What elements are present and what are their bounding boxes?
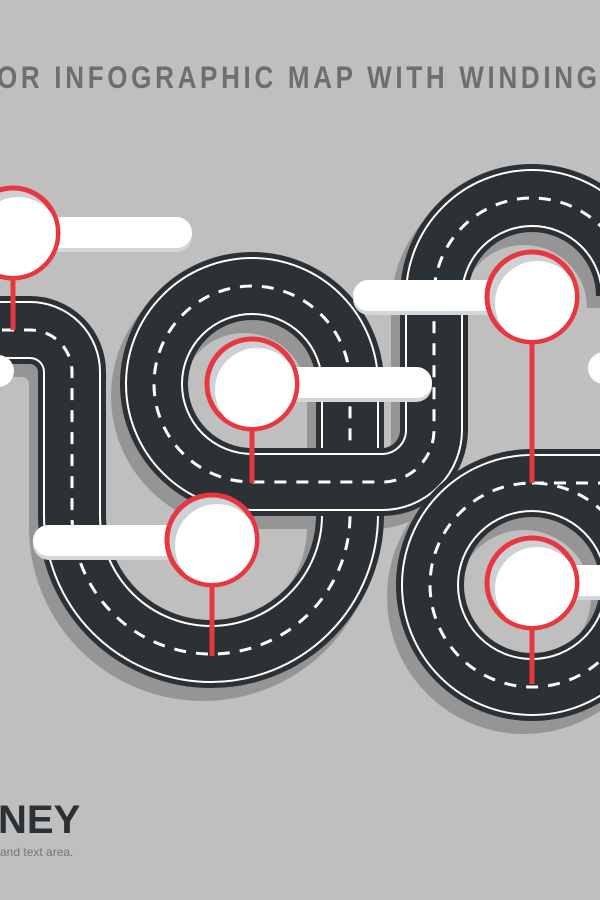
road: main winding path [0, 198, 600, 654]
road shadow [0, 210, 600, 699]
subtitle text: and text area. [0, 845, 73, 859]
title: OR INFOGRAPHIC MAP WITH WINDING [0, 61, 597, 96]
edge bars [0, 352, 600, 387]
road network [0, 198, 600, 699]
marker 4 [33, 495, 259, 656]
marker 5 [487, 538, 600, 684]
marker 2 [207, 339, 432, 483]
heading: journey: NEY [0, 798, 81, 842]
marker 3 [353, 252, 579, 483]
marker 1 [0, 188, 192, 330]
road: bottom-right loop [430, 483, 600, 687]
